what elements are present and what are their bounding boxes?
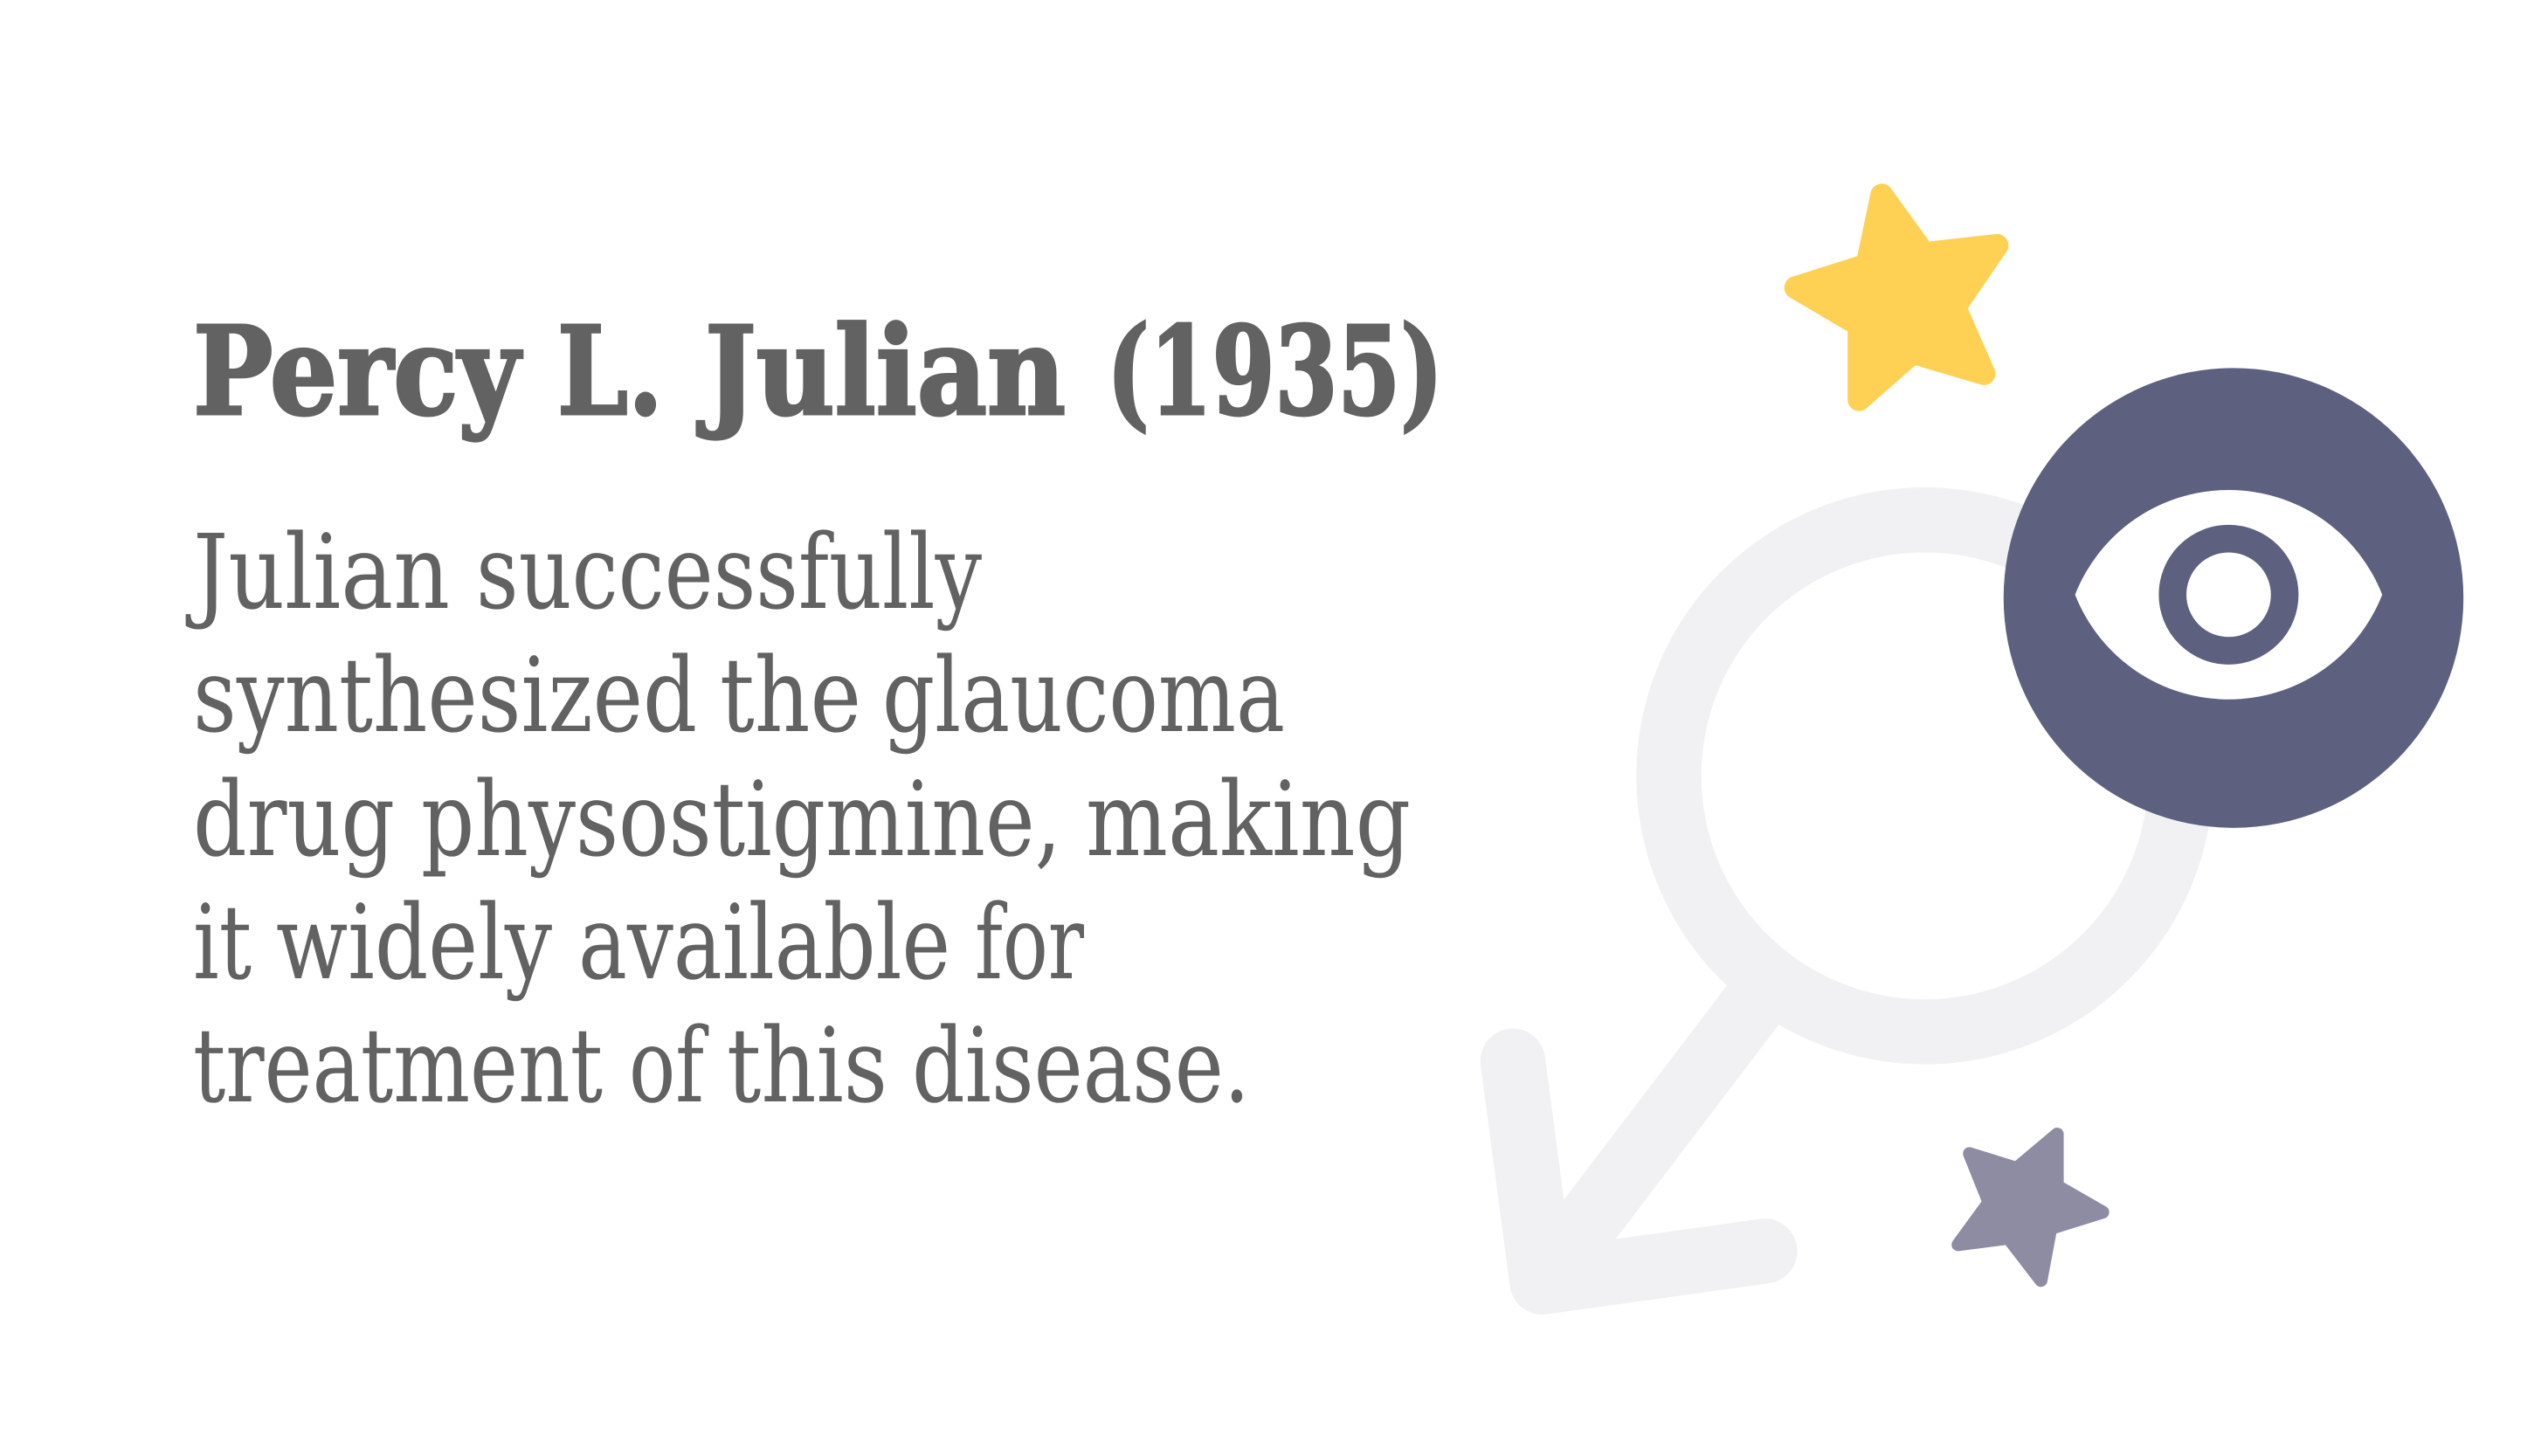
title: Julian — [696, 300, 1066, 444]
body text: this — [727, 1005, 887, 1126]
body text: disease. — [912, 1005, 1250, 1126]
body text: available — [578, 882, 950, 1003]
body text: it — [193, 882, 252, 1003]
body text: synthesized — [193, 635, 697, 756]
title — [193, 300, 1443, 444]
icon: eye badge — [2004, 368, 2463, 828]
body text: glaucoma — [882, 635, 1285, 756]
title: L. — [557, 300, 663, 444]
icon: yellow star — [1796, 195, 1997, 400]
body text: of — [629, 1005, 709, 1126]
icon: purple star — [1958, 1134, 2103, 1280]
body text: widely — [276, 882, 552, 1003]
body text: for — [975, 882, 1084, 1003]
body text: drug — [193, 759, 395, 880]
body text: Julian — [185, 512, 450, 632]
body text: treatment — [193, 1005, 603, 1126]
title: (1935) — [1107, 300, 1443, 444]
body text: physostigmine, — [421, 759, 1061, 880]
icon: male symbol background — [1513, 520, 2181, 1282]
title: Percy — [193, 300, 523, 444]
body text — [185, 512, 1411, 1126]
body text: successfully — [476, 512, 982, 632]
body text: the — [720, 635, 861, 756]
body text: making — [1086, 759, 1411, 880]
